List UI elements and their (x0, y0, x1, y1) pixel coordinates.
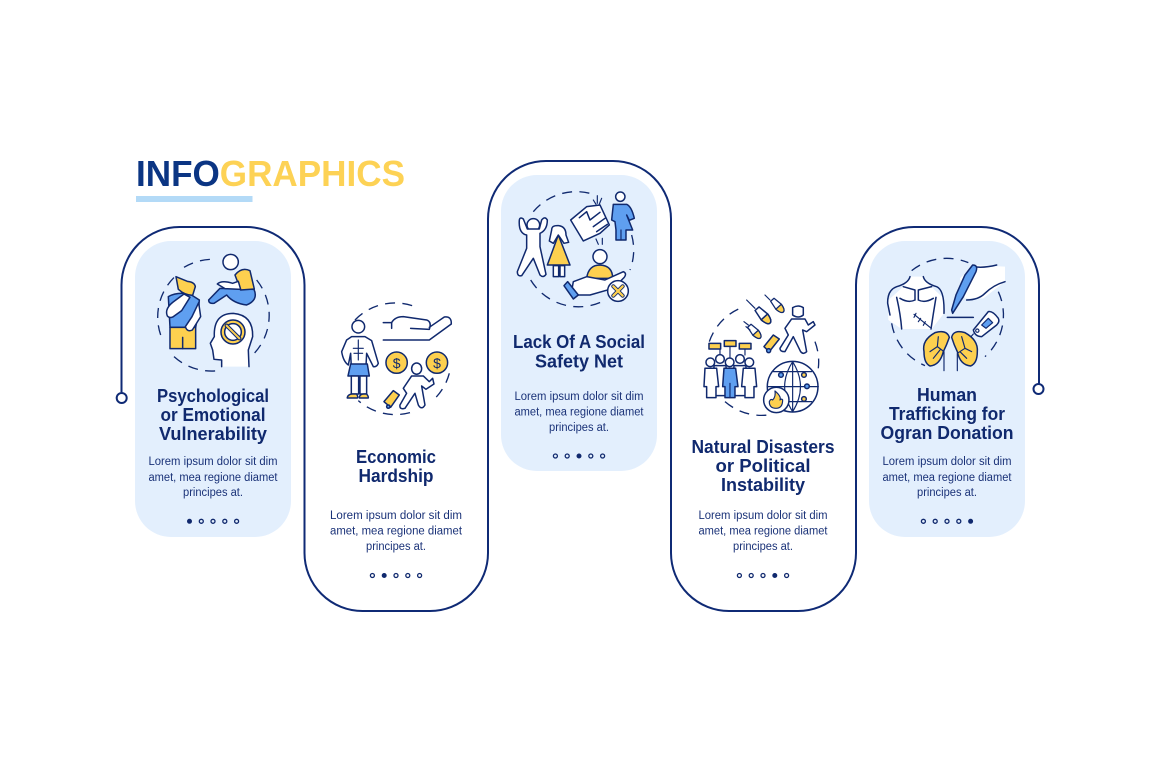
heading: Safety Net (535, 352, 623, 372)
icon: family, fist, and missing helping hand (517, 192, 634, 307)
heading: Natural Disasters (692, 437, 834, 457)
coin symbols (393, 355, 441, 371)
body text: amet, mea regione diamet (514, 406, 644, 418)
heading (356, 447, 436, 486)
panel: lack of social safety net (513, 192, 645, 458)
pagination dots (921, 519, 973, 523)
heading: Lack Of A Social (513, 332, 645, 352)
icon: torso, scalpel, kidneys and tag (888, 258, 1005, 371)
heading (692, 437, 834, 495)
body text: amet, mea regione diamet (148, 472, 278, 484)
heading: Ogran Donation (880, 423, 1014, 443)
body text: Lorem ipsum dolor sit dim (882, 456, 1012, 468)
body text: Lorem ipsum dolor sit dim (330, 510, 462, 522)
heading: Vulnerability (159, 424, 267, 444)
body text: Lorem ipsum dolor sit dim (698, 510, 828, 522)
pagination dots (188, 519, 239, 523)
heading: or Political (716, 456, 810, 476)
heading: or Emotional (160, 405, 266, 425)
body text: principes at. (549, 422, 609, 434)
icon: crowd, missiles, refugee, burning globe (704, 295, 819, 415)
heading: Hardship (358, 466, 434, 486)
panel: psychological vulnerability (148, 254, 278, 523)
body text: principes at. (917, 487, 977, 499)
body text (330, 510, 463, 553)
heading (513, 332, 645, 372)
heading: Economic (356, 447, 436, 467)
icon: labourer, hand, coins and traveller (342, 303, 451, 415)
body text (148, 456, 278, 499)
title: INFOGRAPHICS (136, 153, 405, 194)
body text: amet, mea regione diamet (330, 526, 463, 538)
body text (698, 510, 828, 553)
panel backgrounds (135, 175, 1025, 537)
pagination dots (370, 574, 422, 578)
body text (514, 391, 644, 434)
heading: Instability (721, 475, 805, 495)
heading (880, 385, 1014, 443)
body text: Lorem ipsum dolor sit dim (514, 391, 644, 403)
heading: Human (917, 385, 977, 405)
heading: Psychological (157, 386, 269, 406)
heading: Trafficking for (889, 404, 1005, 424)
body text: principes at. (366, 541, 426, 553)
body text: amet, mea regione diamet (698, 526, 828, 538)
body text: amet, mea regione diamet (882, 472, 1012, 484)
icon: distressed people and blocked mind (158, 254, 269, 371)
body text: Lorem ipsum dolor sit dim (148, 456, 278, 468)
pagination dots (553, 454, 605, 458)
heading (157, 386, 269, 444)
panel: economic hardship (330, 303, 463, 578)
body text: principes at. (733, 541, 793, 553)
body text: principes at. (183, 487, 243, 499)
connecting outline (117, 161, 1043, 611)
coin symbols: $ (393, 355, 401, 371)
panel: natural disasters or political instability (692, 295, 834, 578)
body text (882, 456, 1012, 499)
coin symbols: $ (433, 355, 441, 371)
pagination dots (737, 574, 789, 578)
panel: human trafficking for organ donation (880, 258, 1014, 523)
